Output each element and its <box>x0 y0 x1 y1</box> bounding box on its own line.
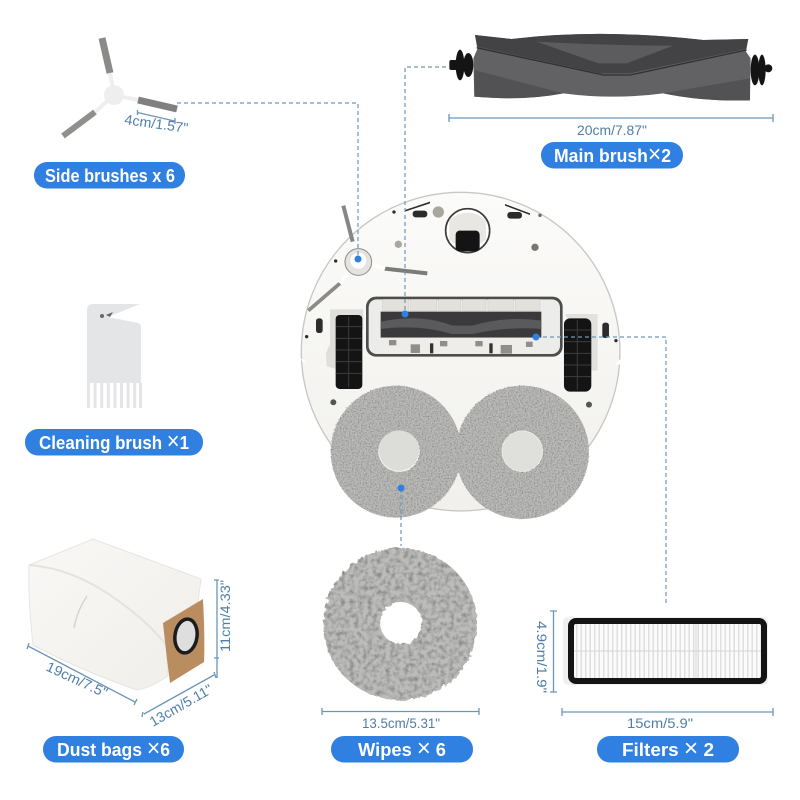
cleaning brush product <box>87 304 142 408</box>
wipe dimension: 13.5cm/5.31" <box>362 715 440 731</box>
dust bag dimensions <box>27 580 233 730</box>
wipe dimension <box>322 708 479 731</box>
label: wipes: Wipes × 6 <box>358 735 446 762</box>
label: dust bags: Dust bags ×6 <box>57 735 170 762</box>
label: main brush: Main brush×2 <box>554 141 671 168</box>
connector: wipes <box>400 488 402 546</box>
label: cleaning brush: Cleaning brush ×1 <box>39 428 189 455</box>
wheels <box>326 309 598 392</box>
connector: filter <box>536 337 666 606</box>
main brush product <box>449 34 772 101</box>
side brush dimension: 4cm/1.57" <box>124 111 189 136</box>
installed side brush <box>308 206 427 311</box>
label: filters: Filters × 2 <box>622 735 714 762</box>
dust bag dimensions: 11cm/4.33" <box>217 580 233 652</box>
connector: main brush <box>405 67 446 314</box>
sensors <box>305 202 618 408</box>
dust bag dimensions: 13cm/5.11" <box>146 681 215 730</box>
filter dimensions: 15cm/5.9" <box>627 715 693 731</box>
label: wipes <box>331 735 473 762</box>
marker dots <box>354 256 540 492</box>
brush bay <box>366 297 563 357</box>
dust bag product <box>29 539 204 690</box>
side brush product <box>63 38 177 136</box>
label: side brushes: Side brushes x 6 <box>45 165 175 186</box>
dust bag dimensions: 19cm/7.5" <box>44 658 110 701</box>
filter product <box>563 617 768 685</box>
label: filters <box>597 735 739 762</box>
caster wheel <box>446 209 490 253</box>
robot vacuum underside <box>300 192 622 519</box>
connector: side brush <box>177 103 358 259</box>
installed wipes <box>331 386 589 519</box>
filter dimensions <box>534 611 773 731</box>
filter dimensions: 4.9cm/1.9" <box>534 621 550 693</box>
main brush dimension <box>449 114 773 138</box>
wipe product <box>323 548 477 700</box>
main brush dimension: 20cm/7.87" <box>577 122 647 138</box>
